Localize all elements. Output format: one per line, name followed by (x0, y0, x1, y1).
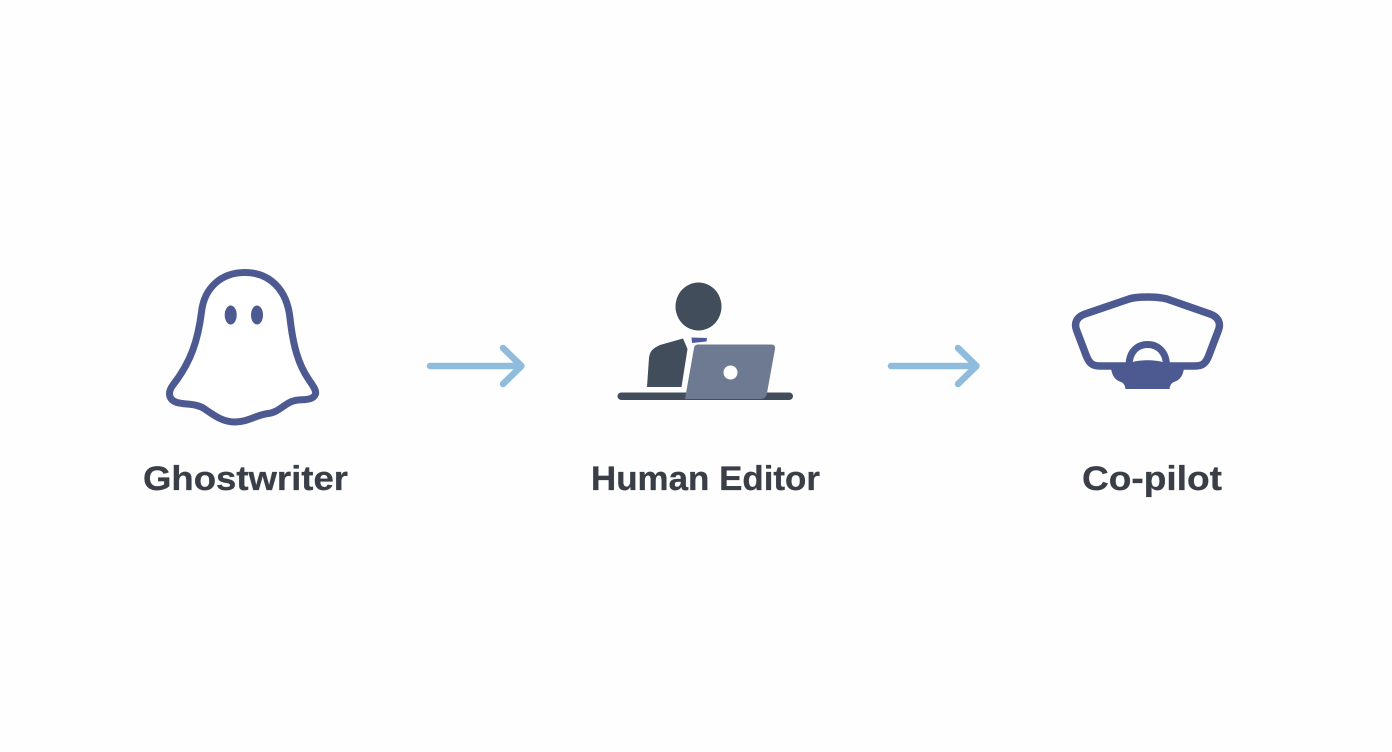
arrow: human editor to co-pilot (891, 348, 976, 384)
laptop dot (724, 366, 738, 380)
icon: human editor at laptop (618, 282, 793, 400)
torso (647, 338, 688, 387)
arrow: ghostwriter to human editor (430, 348, 522, 384)
desk (618, 392, 793, 400)
wheel rim (1076, 297, 1219, 366)
icon: co-pilot steering wheel (1076, 297, 1219, 389)
laptop (685, 344, 775, 399)
hub arch (1129, 344, 1166, 366)
tie (692, 338, 707, 343)
icon: ghost (170, 272, 316, 422)
hub base (1111, 360, 1184, 389)
head (676, 282, 722, 330)
label: Human Editor: Human Editor (591, 460, 820, 498)
label: Co-pilot: Co-pilot (1082, 460, 1222, 498)
label: Ghostwriter: Ghostwriter (143, 460, 348, 498)
